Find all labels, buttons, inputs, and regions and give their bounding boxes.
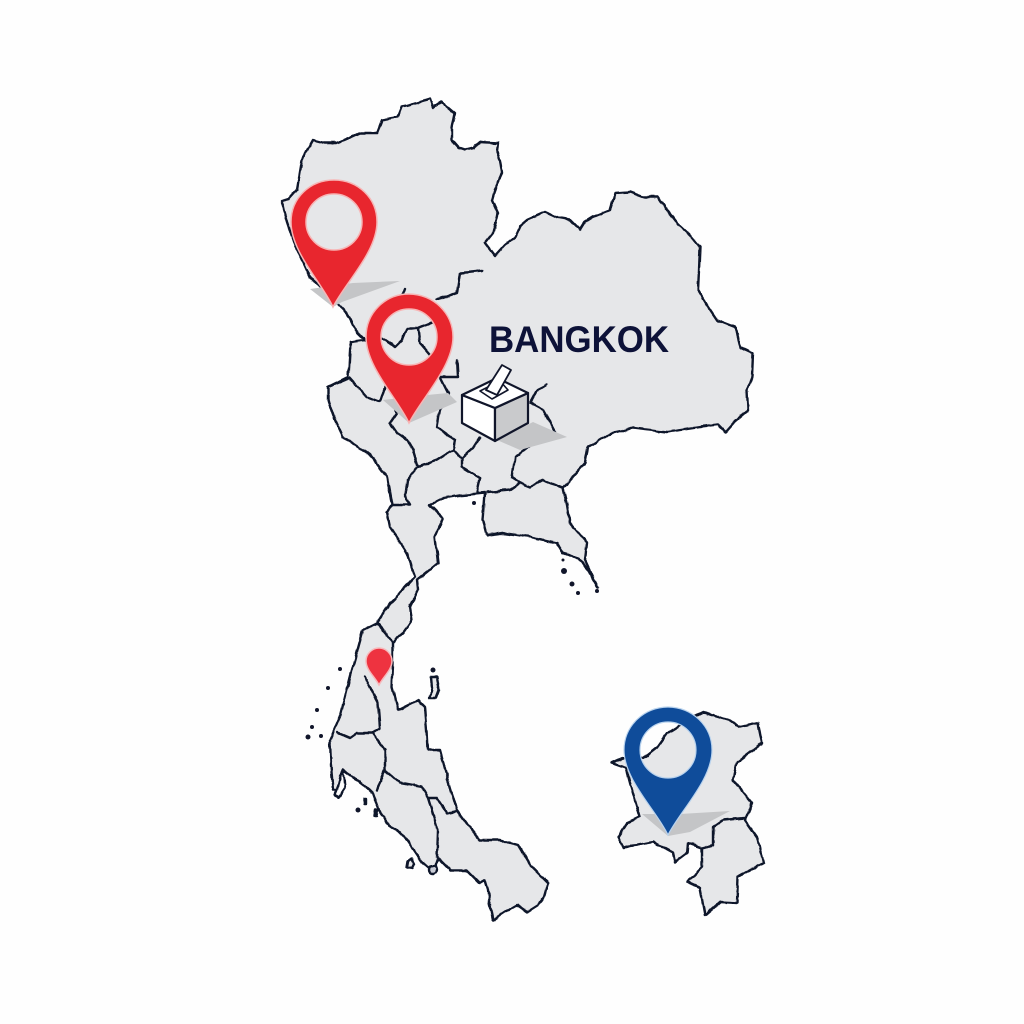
label: BANGKOK: BANGKOK [489, 319, 669, 360]
map: Thailand [281, 99, 753, 920]
pin: red north [291, 180, 377, 307]
region: northern and central province borders [328, 271, 563, 505]
ballot paper [486, 365, 511, 395]
shadow: eastern pin [642, 811, 730, 836]
ballot slot [480, 381, 508, 399]
shadow: central pin [383, 393, 457, 423]
shadow: north pin [310, 281, 400, 307]
ballot box right face [495, 393, 528, 441]
icon: ballot box [462, 365, 528, 441]
region: eastern inner border [702, 818, 745, 848]
ballot box left face [462, 395, 495, 441]
pin: small red south [366, 648, 392, 685]
islands: coastal dots [306, 501, 599, 812]
shadow: ballot box [497, 422, 567, 450]
region: Phang Nga small islands [364, 799, 377, 816]
region: Tarutao-like island [429, 866, 437, 874]
ballot box top [462, 378, 528, 408]
region: eastern outline [612, 712, 763, 915]
region: southern province borders [338, 623, 457, 857]
region: Samui island [430, 677, 439, 698]
pin: red central [366, 294, 453, 423]
pin: blue east [624, 707, 712, 835]
region: small southern island [407, 858, 414, 868]
region: country outline [281, 99, 753, 920]
region: Phuket inlet [335, 770, 345, 797]
map: eastern region [612, 712, 763, 915]
